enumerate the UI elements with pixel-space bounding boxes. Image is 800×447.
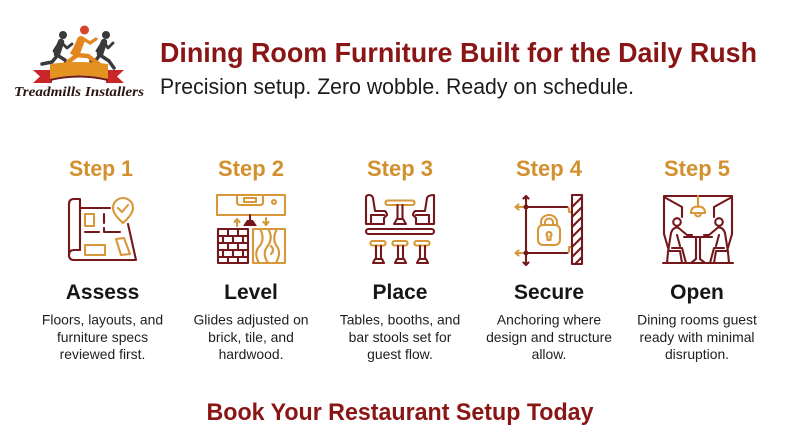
step 4: Secure [486, 156, 612, 362]
icon: booth and bar stools [366, 195, 434, 263]
step label: Step 2 [218, 156, 284, 181]
description: allow. [532, 346, 566, 362]
heading: Place [373, 281, 427, 304]
logo: Treadmills Installers [14, 26, 145, 100]
description: guest flow. [367, 346, 433, 362]
step label: Step 1 [69, 156, 133, 181]
logo wordmark: Treadmills Installers [14, 85, 145, 100]
step label: Step 5 [664, 156, 730, 181]
description: hardwood. [219, 346, 283, 362]
subtitle: Precision setup. Zero wobble. Ready on schedule. [160, 74, 634, 99]
icon: floor plan [69, 198, 136, 260]
step 1: Assess [42, 156, 163, 362]
step 2: Level [193, 156, 309, 362]
description: brick, tile, and [208, 329, 294, 345]
description: Floors, layouts, and [42, 312, 163, 328]
description [42, 312, 163, 362]
heading: Secure [514, 281, 584, 304]
step 5: Open [637, 156, 757, 362]
step label: Step 4 [516, 156, 583, 181]
heading: Open [670, 281, 724, 304]
call to action: Book Your Restaurant Setup Today [206, 399, 594, 426]
description: design and structure [486, 329, 612, 345]
icon: centre runner [68, 26, 101, 69]
icon: padlock anchored to wall [516, 195, 582, 265]
description [340, 312, 460, 362]
description: Anchoring where [497, 312, 601, 328]
description [193, 312, 309, 362]
step label: Step 3 [367, 156, 433, 181]
icon: two guests at table under lamp [663, 196, 733, 263]
description: ready with minimal [639, 329, 755, 345]
icon: level over brick and wood [217, 195, 285, 263]
description: disruption. [665, 346, 729, 362]
description: furniture specs [57, 329, 148, 345]
description: Tables, booths, and [340, 312, 460, 328]
description: bar stools set for [349, 329, 452, 345]
description: Glides adjusted on [193, 312, 309, 328]
description [486, 312, 612, 362]
icon: left runner [42, 31, 72, 69]
heading: Assess [66, 281, 139, 304]
description: reviewed first. [60, 346, 145, 362]
heading: Level [224, 281, 278, 304]
description [637, 312, 757, 362]
description: Dining rooms guest [637, 312, 757, 328]
icon: banner [33, 62, 124, 83]
step 3: Place [340, 156, 460, 362]
title: Dining Room Furniture Built for the Daily Rush [160, 37, 757, 68]
icon: right runner [91, 31, 114, 68]
